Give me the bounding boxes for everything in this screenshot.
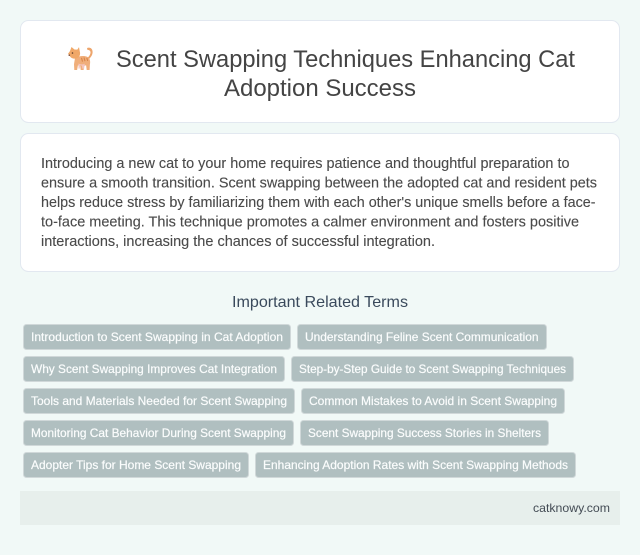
title text: Scent Swapping Techniques Enhancing Cat xyxy=(116,46,575,73)
title text xyxy=(116,46,575,102)
footer: catknowy.com xyxy=(533,501,610,515)
tag: step-by-step: Step-by-Step Guide to Scent Swapping Techniques xyxy=(299,362,566,376)
tag list xyxy=(24,324,576,478)
panel: introduction text: helps reduce stress by familiarizing them with each other's unique smells before a face- xyxy=(41,194,596,211)
tag: mistakes xyxy=(302,388,564,414)
icon: cat xyxy=(68,47,93,70)
tag: success stories: Scent Swapping Success Stories in Shelters xyxy=(308,426,541,440)
tag: monitoring: Monitoring Cat Behavior During Scent Swapping xyxy=(31,426,286,440)
tag: introduction xyxy=(24,324,290,350)
panel: introduction text xyxy=(20,134,620,272)
panel: introduction text: to-face meeting. This technique promotes a calmer environment and fosters positive xyxy=(41,214,579,230)
panel: introduction text: Introducing a new cat to your home requires patience and thoughtful preparation to xyxy=(41,155,570,172)
tag: integration: Why Scent Swapping Improves Cat Integration xyxy=(31,362,277,376)
panel: title card xyxy=(20,20,620,122)
tag: introduction: Introduction to Scent Swapping in Cat Adoption xyxy=(31,330,283,344)
tag: mistakes: Common Mistakes to Avoid in Scent Swapping xyxy=(309,394,557,408)
tag: step-by-step xyxy=(292,356,574,382)
tag: integration xyxy=(24,356,284,382)
footer xyxy=(20,491,620,525)
tag: feline communication: Understanding Feline Scent Communication xyxy=(305,330,538,344)
tag: feline communication xyxy=(298,324,546,350)
tag: tools: Tools and Materials Needed for Scent Swapping xyxy=(31,394,287,408)
heading: important related terms: Important Related Terms xyxy=(232,294,408,311)
tag: success stories xyxy=(300,420,548,446)
panel: introduction text: ensure a smooth transition. Scent swapping between the adopted cat and resident pets xyxy=(41,174,597,192)
title text: Adoption Success xyxy=(224,75,416,102)
tag: adoption rates: Enhancing Adoption Rates with Scent Swapping Methods xyxy=(263,458,568,472)
tag: tools xyxy=(24,388,294,414)
tag: adoption rates xyxy=(256,452,576,478)
tag: adopter tips: Adopter Tips for Home Scent Swapping xyxy=(31,458,241,472)
panel: introduction text: interactions, increasing the chances of successful integration. xyxy=(41,233,435,250)
tag: adopter tips xyxy=(24,452,248,478)
tag: monitoring xyxy=(24,420,294,446)
